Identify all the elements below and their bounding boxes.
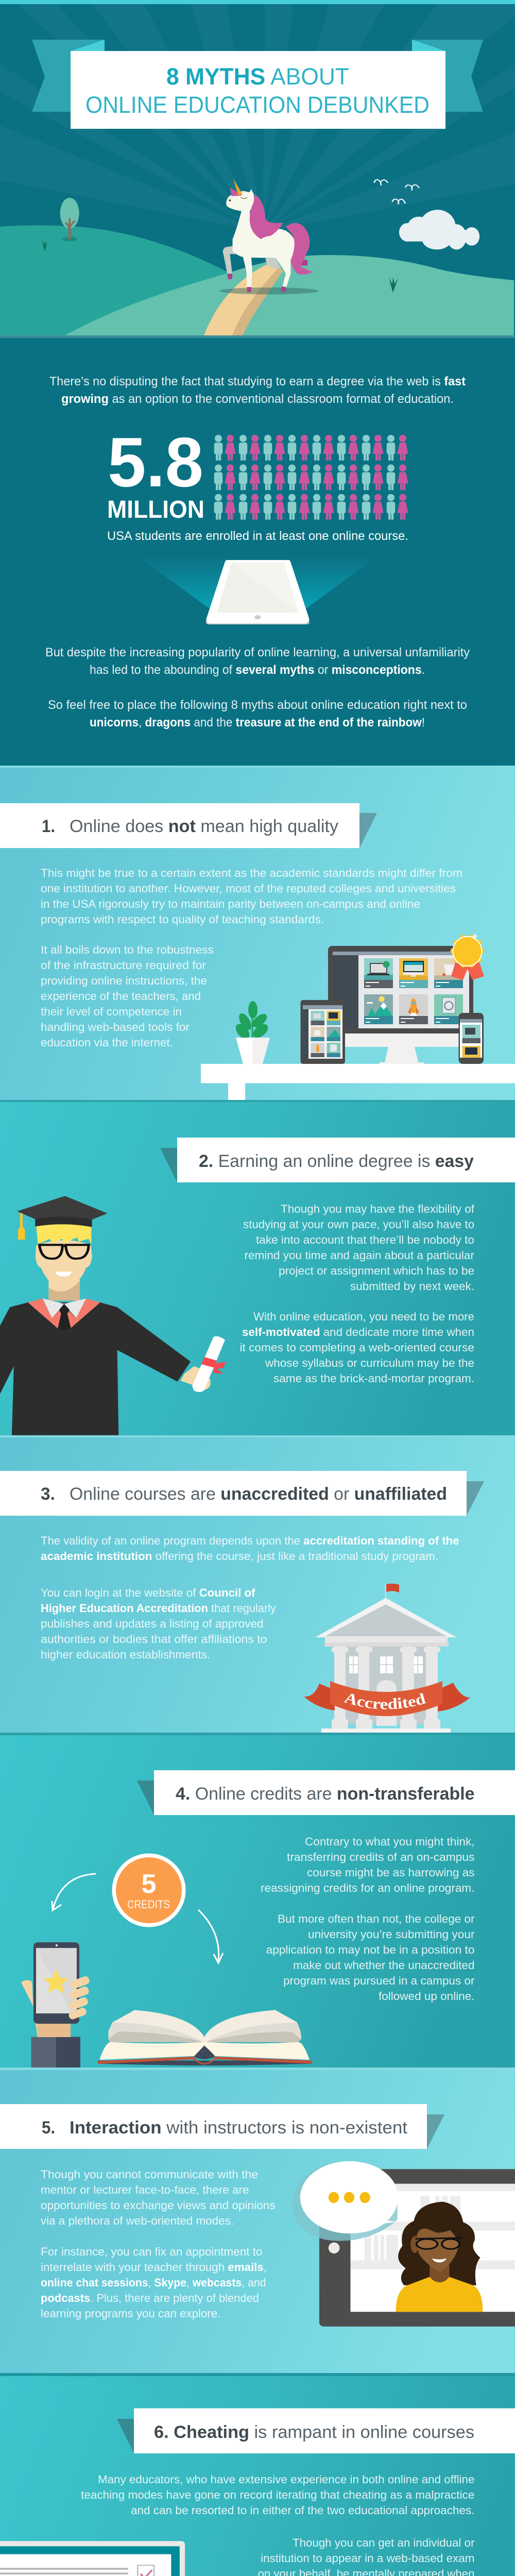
heading 4: 4. Online credits are non-transferable xyxy=(176,1784,475,1804)
arrow: to book xyxy=(198,1910,223,1963)
text: myth 3: You can login at the website of Council of xyxy=(41,1586,255,1599)
text: myth 4: university you’re submitting your xyxy=(308,1928,475,1941)
outro text: has led to the abounding of several myths or misconceptions. xyxy=(90,663,425,677)
intro text xyxy=(49,375,466,406)
heading 2 xyxy=(160,1138,515,1182)
ribbon banner xyxy=(32,40,483,129)
text: myth 5: interrelate with your teacher through emails, xyxy=(41,2261,267,2274)
text: myth 1: education via the internet. xyxy=(41,1036,173,1049)
text: myth 4: program was pursued in a campus or xyxy=(283,1974,475,1987)
panel: myth 2 xyxy=(0,1102,515,1435)
text: myth 6: institution to appear in a web-based exam xyxy=(261,2552,475,2565)
text: myth 3 xyxy=(41,1534,459,1661)
panel: myth 3 xyxy=(0,1435,515,1735)
speech bubble shadow xyxy=(293,2162,398,2241)
text: myth 3: Higher Education Accreditation that regularly xyxy=(41,1602,276,1615)
ribbon label xyxy=(344,1702,430,1709)
text: myth 1: This might be true to a certain extent as the academic standards might differ from xyxy=(41,867,462,879)
illustration: accredited building: Accredited xyxy=(344,1693,426,1709)
wall xyxy=(340,1647,434,1724)
illustration: laptop and magnifier xyxy=(0,2541,200,2576)
heading 3: Online courses are unaccredited or unaffiliated xyxy=(70,1484,447,1504)
arrow: to phone xyxy=(52,1874,96,1910)
text: myth 2: submitted by next week. xyxy=(350,1280,474,1293)
tablet frame xyxy=(319,2169,515,2327)
icon: 5 credits badge: CREDITS xyxy=(127,1898,170,1911)
text: myth 2: it comes to completing a web-oriented course xyxy=(240,1341,474,1354)
hair xyxy=(36,1225,91,1244)
pictogram: students xyxy=(214,435,408,520)
text: myth 5: online chat sessions, Skype, webcasts, and xyxy=(41,2276,266,2289)
text: myth 2: studying at your own pace, you’ll also have to xyxy=(243,1218,474,1231)
text: myth 4: Contrary to what you might think, xyxy=(305,1835,475,1848)
gown xyxy=(0,1302,191,1435)
text: myth 5 xyxy=(41,2168,275,2320)
heading 2: 2. Earning an online degree is easy xyxy=(199,1151,474,1171)
columns xyxy=(332,1647,440,1728)
text: myth 2: self-motivated and dedicate more time when xyxy=(242,1326,474,1338)
text: myth 1: their level of competence in xyxy=(41,1005,182,1018)
heading 3 xyxy=(0,1471,484,1516)
phone xyxy=(458,1013,484,1064)
text: myth 4: application to may not be in a position to xyxy=(266,1943,475,1956)
text: myth 1: It all boils down to the robustness xyxy=(41,943,214,956)
intro text: There’s no disputing the fact that studying to earn a degree via the web is fast xyxy=(49,375,466,388)
text: myth 3: authorities or bodies that offer affiliations to xyxy=(41,1633,267,1646)
text: myth 2: remind you time and again about a particular xyxy=(244,1249,474,1262)
heading 3: 3. xyxy=(41,1484,55,1504)
lapels xyxy=(28,1298,100,1328)
text: myth 1: experience of the teachers, and xyxy=(41,990,201,1003)
roof xyxy=(315,1598,456,1637)
shelf xyxy=(201,1064,515,1100)
outro text: But despite the increasing popularity of online learning, a universal unfamiliarity xyxy=(45,646,470,659)
text: myth 2: same as the brick-and-mortar program. xyxy=(273,1372,474,1385)
grass tufts xyxy=(41,240,398,293)
panel: myth 6 xyxy=(0,2373,515,2576)
text: myth 2: project or assignment which has to be xyxy=(279,1264,474,1277)
intro text: growing as an option to the conventional classroom format of education. xyxy=(61,392,454,406)
title: 8 MYTHS ABOUT xyxy=(166,63,349,90)
text: myth 4: transferring credits of an on-campus xyxy=(287,1851,475,1863)
text: myth 4: make out whether the unaccredited xyxy=(293,1959,475,1972)
heading 5: Interaction with instructors is non-existent xyxy=(70,2118,408,2138)
windows xyxy=(349,1656,423,1673)
text: myth 3: academic institution offering the course, just like a traditional study program. xyxy=(41,1550,438,1563)
outro text: unicorns, dragons and the treasure at the end of the rainbow! xyxy=(90,716,425,730)
outro text xyxy=(45,646,470,730)
text: myth 1: handling web-based tools for xyxy=(41,1021,190,1033)
text: myth 4: followed up online. xyxy=(379,1990,475,2003)
text: myth 2: Though you may have the flexibility of xyxy=(281,1202,475,1215)
text: myth 1: in the USA rigorously try to maintain parity between on-campus and online xyxy=(41,897,420,910)
laptop xyxy=(0,2541,185,2576)
checkboxes xyxy=(138,2565,154,2576)
heading 1: 1. xyxy=(42,817,55,836)
text: myth 4: course might be as harrowing as xyxy=(307,1866,475,1879)
form lines xyxy=(0,2568,128,2576)
illustration: desk with devices xyxy=(201,933,515,1100)
text: myth 1: programs with respect to quality of teaching standards. xyxy=(41,913,324,926)
plant xyxy=(233,1001,270,1064)
text: myth 5: learning programs you can explore. xyxy=(41,2307,220,2320)
outro text: So feel free to place the following 8 myths about online education right next to xyxy=(48,698,467,712)
text: myth 5: For instance, you can fix an appointment to xyxy=(41,2245,263,2258)
heading 6 xyxy=(117,2408,515,2453)
cloud xyxy=(399,210,479,249)
panel: hero xyxy=(0,0,515,338)
heading 1 xyxy=(0,803,377,848)
heading 5 xyxy=(0,2104,444,2149)
text: myth 6: Many educators, who have extensive experience in both online and offline xyxy=(98,2473,475,2486)
glasses xyxy=(40,1245,89,1259)
text: myth 3: The validity of an online program depends upon the accreditation standing of the xyxy=(41,1534,459,1547)
text: myth 4 xyxy=(261,1835,475,2003)
unicorn xyxy=(219,179,319,294)
text: myth 3: publishes and updates a listing of approved xyxy=(41,1617,264,1630)
illustration: accredited building xyxy=(304,1584,470,1733)
text: myth 2: With online education, you need to be more xyxy=(253,1310,474,1323)
title: ONLINE EDUCATION DEBUNKED xyxy=(85,92,430,118)
flag xyxy=(385,1584,386,1598)
text: myth 2: take into account that there’ll be nobody to xyxy=(256,1233,474,1246)
illustration: video call on tablet xyxy=(293,2161,515,2327)
text: myth 1: of the infrastructure required for xyxy=(41,959,206,972)
text: myth 3: higher education establishments. xyxy=(41,1648,210,1661)
heading 5: 5. xyxy=(42,2118,55,2138)
text: myth 5: Though you cannot communicate with the xyxy=(41,2168,258,2181)
panel: myth 1 xyxy=(0,766,515,1102)
heading 4 xyxy=(137,1770,515,1815)
panel: myth 5 xyxy=(0,2067,515,2373)
tree xyxy=(60,198,79,241)
text: myth 1: one institution to another. However, most of the reputed colleges and universities xyxy=(41,882,456,895)
text: myth 5: mentor or lecturer face-to-face, there are xyxy=(41,2183,249,2196)
hand and diploma behind sleeve xyxy=(181,1366,211,1390)
stat caption: USA students are enrolled in at least one online course. xyxy=(107,529,408,543)
text: myth 5: opportunities to exchange views and opinions xyxy=(41,2199,275,2212)
tablet xyxy=(301,1000,345,1064)
text: myth 5: podcasts. Plus, there are plenty of blended xyxy=(41,2292,259,2304)
panel: myth 4 xyxy=(0,1735,515,2067)
text: myth 5: via a plethora of web-oriented modes. xyxy=(41,2214,234,2227)
text: myth 1: providing online instructions, the xyxy=(41,974,207,987)
text: myth 2 xyxy=(240,1202,475,1385)
woman xyxy=(398,2201,480,2285)
head xyxy=(36,1240,92,1287)
text: myth 6 xyxy=(81,2473,475,2576)
hills and road xyxy=(0,225,514,335)
monitor xyxy=(328,946,473,1064)
icon: 5 credits badge: 5 xyxy=(142,1869,156,1899)
title xyxy=(85,63,430,118)
text: myth 6: and can be resorted to in either of the two educational approaches. xyxy=(131,2504,475,2517)
text: myth 6: teaching modes have gone on record iterating that cheating as a malpractice xyxy=(81,2488,474,2501)
door xyxy=(376,1680,397,1726)
panel: intro xyxy=(0,338,515,766)
birds xyxy=(374,180,419,204)
heading 6: 6. Cheating is rampant in online courses xyxy=(154,2422,474,2442)
icon: tablet with light beam xyxy=(138,556,377,624)
stat: 5.8 million: 5.8 xyxy=(108,423,203,501)
cap xyxy=(35,1215,92,1227)
illustration: open book xyxy=(98,2010,312,2065)
neck xyxy=(48,1280,80,1300)
speech bubble xyxy=(300,2161,398,2233)
ribbon xyxy=(304,1684,335,1710)
text: myth 1 xyxy=(41,867,462,1049)
illustration: graduate xyxy=(0,1196,226,1435)
text: myth 2: whose syllabus or curriculum may be the xyxy=(265,1357,474,1369)
text: myth 6: Though you can get an individual or xyxy=(293,2536,475,2549)
illustration: hand holding phone xyxy=(21,1942,91,2067)
stat: 5.8 million: MILLION xyxy=(107,496,204,523)
text: myth 4: But more often than not, the college or xyxy=(278,1912,475,1925)
heading 1: Online does not mean high quality xyxy=(70,817,338,836)
icon: 5 credits badge xyxy=(112,1854,185,1927)
icon: award badge xyxy=(450,933,484,980)
text: myth 4: reassigning credits for an online program. xyxy=(261,1882,475,1894)
